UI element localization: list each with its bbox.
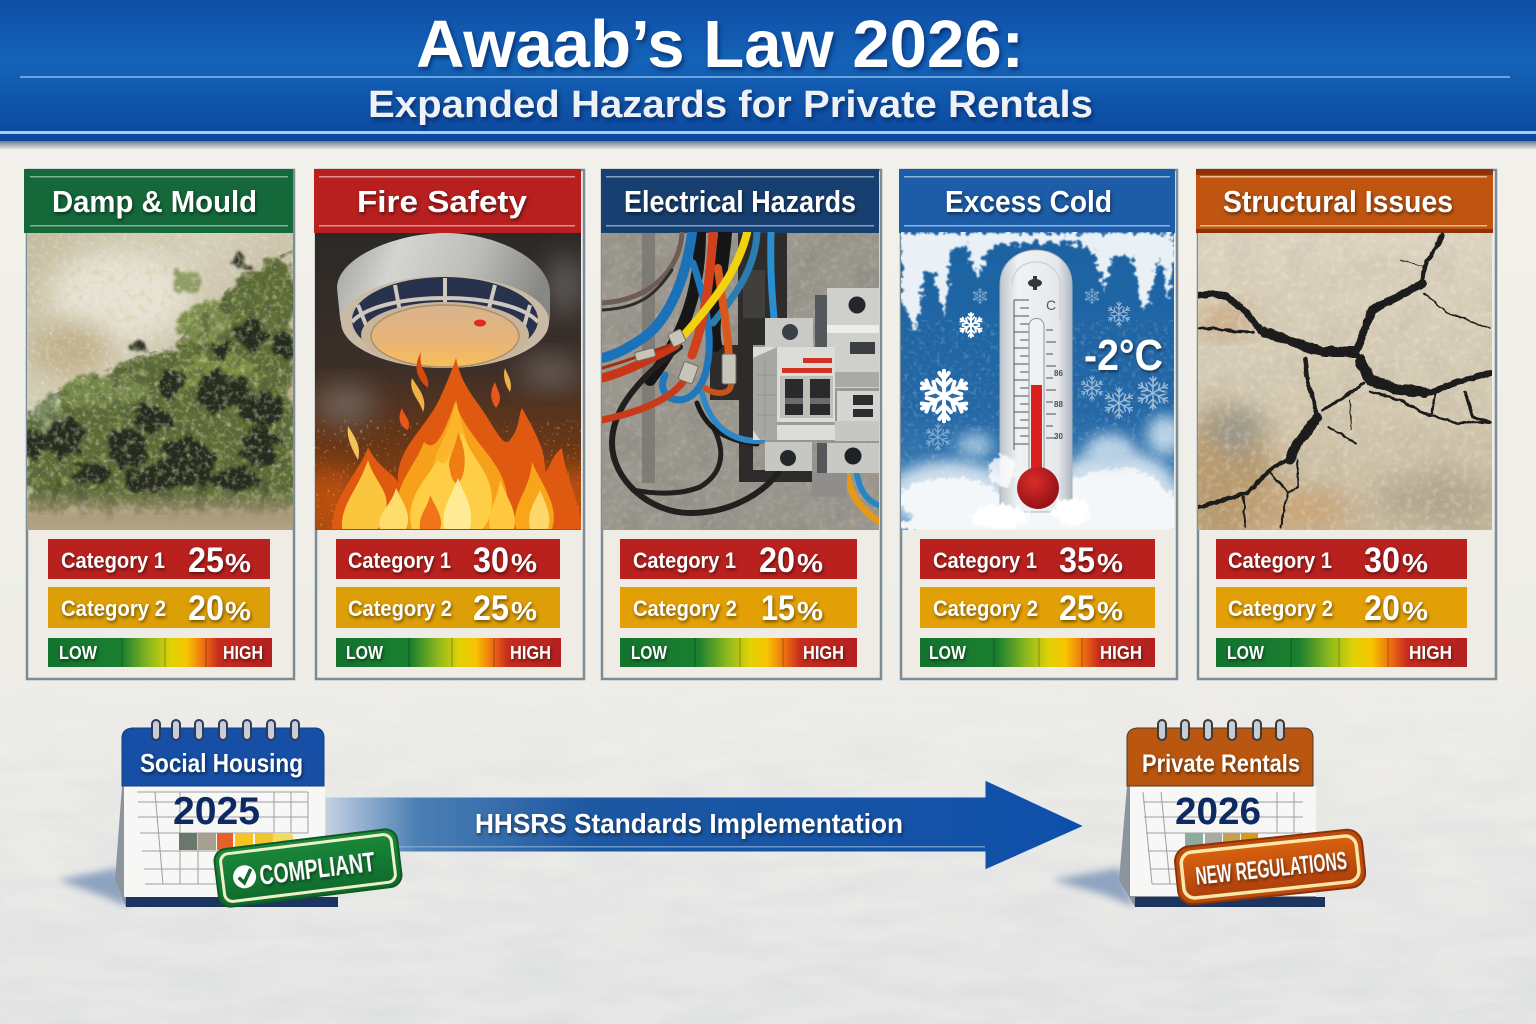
panel: fire safety	[300, 169, 600, 679]
calendar: private rentals 2026	[1052, 720, 1325, 907]
cracks	[1198, 235, 1490, 527]
heading: electrical hazards	[601, 169, 879, 233]
category 1 row: Category 1	[633, 548, 736, 573]
category 2 row: Category 2	[633, 596, 737, 621]
badge: new regulations: NEW REGULATIONS	[1194, 847, 1348, 891]
heading: damp and mould: Damp & Mould	[52, 184, 257, 219]
category 2 row	[620, 587, 857, 628]
badge: compliant: COMPLIANT	[258, 846, 377, 891]
category 1 row: 30	[473, 541, 509, 580]
risk level bar	[1216, 638, 1467, 667]
category 1 row	[1216, 539, 1467, 580]
risk level bar: HIGH	[223, 643, 263, 663]
risk level bar: LOW	[1227, 643, 1264, 663]
panel: damp and mould	[24, 169, 294, 679]
panel: electrical hazards	[601, 169, 881, 679]
category 1 row: 35	[1059, 541, 1095, 580]
category 1 row	[48, 539, 270, 580]
mounting plate	[710, 233, 812, 482]
panel: excess cold	[888, 169, 1190, 679]
risk level bar: LOW	[929, 643, 966, 663]
risk level bar	[48, 638, 272, 667]
calendar year: 2025	[173, 790, 260, 833]
wires	[602, 233, 878, 521]
heading: fire safety: Fire Safety	[357, 184, 528, 219]
illustration: wires and circuit breakers	[602, 233, 879, 530]
risk level bar: LOW	[59, 643, 97, 663]
category 2 row: 25	[473, 589, 509, 628]
category 2 row	[920, 587, 1155, 628]
category 1 row: 30	[1364, 541, 1400, 580]
risk level bar	[620, 638, 857, 667]
category 1 row: 25	[188, 541, 224, 580]
category 1 row: Category 1	[1228, 548, 1332, 573]
arrow: HHSRS standards implementation	[325, 780, 1084, 870]
risk level bar: HIGH	[510, 643, 551, 663]
badge: compliant	[213, 828, 403, 908]
header banner	[0, 0, 1536, 150]
category 2 row: 20	[1364, 589, 1400, 628]
snowflakes	[919, 288, 1170, 450]
risk level bar: HIGH	[1100, 643, 1142, 663]
arrow: HHSRS standards implementation: HHSRS Standards Implementation	[475, 808, 903, 839]
category 1 row: Category 1	[933, 548, 1037, 573]
category 1 row	[920, 539, 1155, 580]
category 1 row: %	[511, 548, 537, 578]
category 1 row	[620, 539, 857, 580]
panel: structural issues	[1175, 169, 1500, 679]
category 1 row: Category 1	[348, 548, 451, 573]
category 2 row: Category 2	[348, 596, 452, 621]
risk level bar: HIGH	[1409, 643, 1452, 663]
heading: structural issues: Structural Issues	[1223, 184, 1453, 219]
category 1 row	[336, 539, 560, 580]
thermometer: 30	[1054, 432, 1063, 441]
thermometer: 86	[1054, 369, 1063, 378]
category 2 row: %	[511, 596, 537, 626]
subtitle: Expanded Hazards for Private Rentals	[368, 84, 1093, 126]
heading: excess cold	[899, 169, 1175, 233]
category 2 row: %	[225, 596, 251, 626]
illustration: mould on a wall	[25, 233, 293, 530]
category 2 row: 25	[1059, 589, 1095, 628]
binder rings	[1158, 720, 1284, 740]
heading: electrical hazards: Electrical Hazards	[624, 184, 856, 219]
smoke alarm	[337, 233, 550, 368]
title: Awaab’s Law 2026:	[416, 7, 1024, 82]
thermometer	[1000, 250, 1072, 512]
category 1 row: 20	[759, 541, 795, 580]
risk level bar: LOW	[346, 643, 383, 663]
calendar label: Social Housing	[140, 748, 303, 778]
illustration: cracked concrete	[1198, 232, 1492, 530]
category 1 row: %	[1402, 548, 1428, 578]
calendar year: 2026	[1175, 791, 1261, 833]
heading: structural issues	[1196, 169, 1493, 233]
category 2 row: 15	[761, 589, 795, 628]
category 1 row: %	[797, 548, 823, 578]
badge: new regulations	[1174, 828, 1367, 906]
illustration: smoke alarm and flames	[315, 233, 581, 530]
binder rings	[152, 720, 299, 740]
illustration: thermometer in frost	[901, 232, 1174, 530]
category 2 row: %	[1097, 596, 1123, 626]
category 2 row	[336, 587, 560, 628]
category 1 row: Category 1	[61, 548, 165, 573]
category 2 row: %	[797, 596, 823, 626]
frost and icicles	[901, 233, 1174, 330]
category 2 row: %	[1402, 596, 1428, 626]
thermometer: C	[1046, 297, 1056, 313]
risk level bar	[336, 638, 561, 667]
risk level bar	[920, 638, 1155, 667]
heading: fire safety	[314, 169, 581, 233]
temperature reading: -2°C	[1084, 331, 1163, 380]
calendar: social housing 2025	[58, 720, 338, 907]
category 2 row: Category 2	[933, 596, 1038, 621]
risk level bar: LOW	[631, 643, 667, 663]
category 1 row: %	[1097, 548, 1123, 578]
heading: excess cold: Excess Cold	[945, 184, 1112, 219]
circuit breakers	[753, 288, 879, 497]
category 2 row: 20	[188, 589, 224, 628]
category 2 row	[1216, 587, 1467, 628]
wire connectors	[634, 329, 736, 384]
category 2 row	[48, 587, 270, 628]
calendar label: Private Rentals	[1142, 750, 1300, 778]
category 1 row: %	[225, 548, 251, 578]
heading: damp and mould	[24, 169, 293, 233]
thermometer: 88	[1054, 400, 1063, 409]
flames	[332, 352, 582, 529]
category 2 row: Category 2	[61, 596, 166, 621]
risk level bar: HIGH	[803, 643, 844, 663]
category 2 row: Category 2	[1228, 596, 1333, 621]
